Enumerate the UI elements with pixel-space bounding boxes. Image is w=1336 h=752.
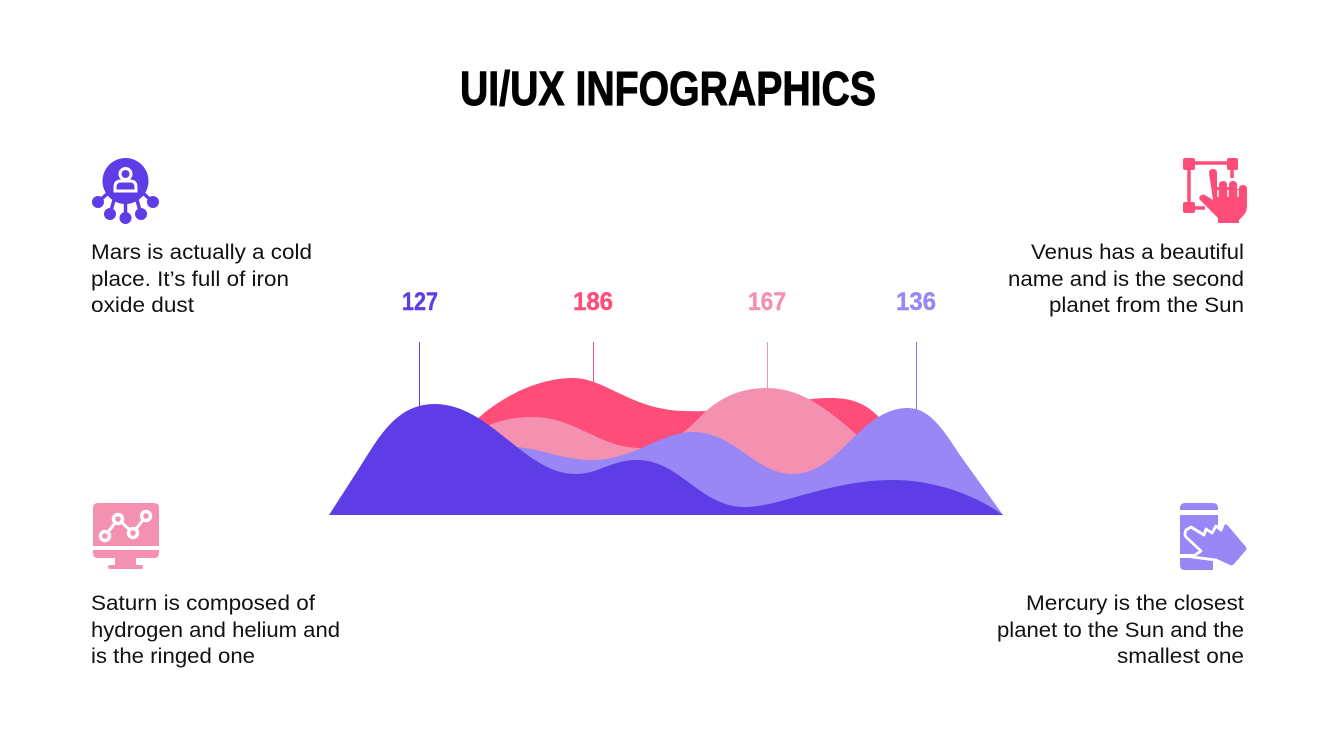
area: red bbox=[470, 378, 890, 480]
icon: hand selecting bbox=[1183, 158, 1247, 223]
text: mars: oxide dust bbox=[91, 294, 194, 317]
text: saturn: is the ringed one bbox=[91, 645, 255, 668]
text: mercury: planet to the Sun and the bbox=[997, 619, 1244, 642]
panel: mercury bbox=[997, 503, 1248, 668]
text: mars bbox=[91, 241, 312, 317]
icon: hand on phone bbox=[1180, 503, 1248, 570]
title: UI/UX INFOGRAPHICS bbox=[460, 63, 876, 116]
value: 186 bbox=[573, 288, 613, 382]
panel: saturn bbox=[91, 503, 340, 668]
text: venus: name and is the second bbox=[1008, 268, 1244, 291]
icon: monitor with line chart bbox=[93, 503, 159, 569]
text: venus: Venus has a beautiful bbox=[1031, 241, 1244, 264]
text: mars: place. It’s full of iron bbox=[91, 268, 289, 291]
chart: layered area chart bbox=[329, 288, 1003, 515]
panel: mars bbox=[91, 158, 312, 317]
text: mercury: smallest one bbox=[1117, 645, 1244, 668]
text: mercury bbox=[997, 592, 1244, 668]
area: light purple bbox=[510, 408, 1003, 515]
value: 167 bbox=[748, 288, 786, 388]
value: 136 bbox=[896, 288, 936, 410]
value: 136: 136 bbox=[896, 288, 936, 316]
text: mars: Mars is actually a cold bbox=[91, 241, 312, 264]
value: 167: 167 bbox=[748, 288, 786, 316]
text: mercury: Mercury is the closest bbox=[1026, 592, 1244, 615]
text: saturn: Saturn is composed of bbox=[91, 592, 315, 615]
icon: user network bbox=[92, 158, 159, 224]
area: dark purple bbox=[329, 404, 1003, 515]
value: 127: 127 bbox=[402, 288, 438, 316]
value: 127 bbox=[402, 288, 438, 408]
text: venus: planet from the Sun bbox=[1049, 294, 1244, 317]
area: pink bbox=[485, 388, 868, 490]
text: saturn: hydrogen and helium and bbox=[91, 619, 340, 642]
text: venus bbox=[1008, 241, 1244, 317]
panel: venus bbox=[1008, 158, 1247, 317]
text: saturn bbox=[91, 592, 340, 668]
value: 186: 186 bbox=[573, 288, 613, 316]
